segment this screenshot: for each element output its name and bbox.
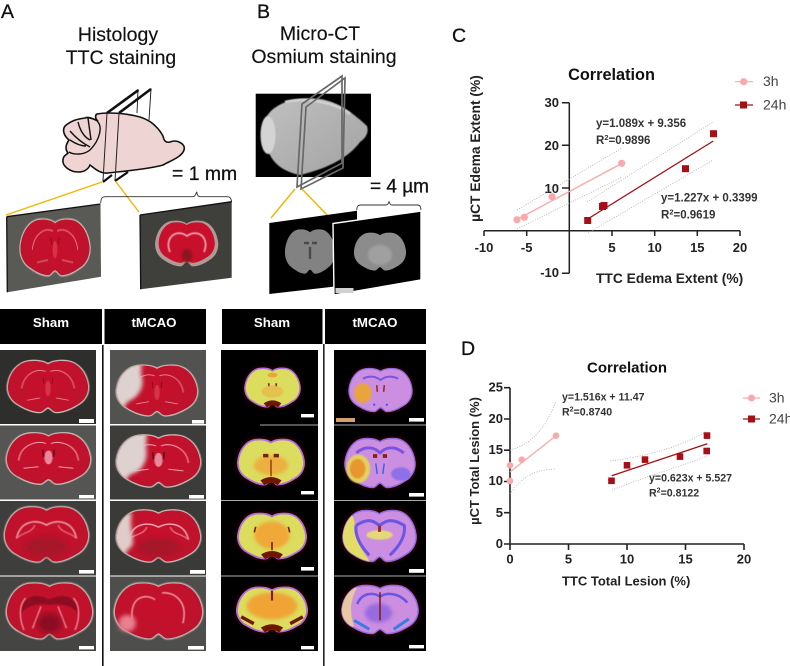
- bracket: spacing between slices: [357, 202, 421, 210]
- tick labels: 0: [506, 552, 514, 566]
- equation: 24h fit: 2: [669, 208, 673, 216]
- header: sham: Sham: [254, 315, 290, 330]
- photo: TTC section two: [140, 202, 232, 289]
- axis title: x: TTC Total Lesion (%): [562, 574, 690, 589]
- tick labels: 20: [733, 240, 747, 255]
- heading: micro-CT osmium staining: Osmium staining: [251, 46, 397, 68]
- legend: 24h: [763, 96, 786, 112]
- axis title: y: µCT Edema Extent (%): [468, 75, 483, 222]
- tick labels: [475, 95, 747, 280]
- tick labels: 20: [489, 411, 503, 426]
- equation: 3h fit: R: [562, 407, 570, 419]
- tick labels: 20: [545, 138, 559, 153]
- confidence bands: [517, 122, 713, 233]
- panel: C edema correlation chart: [452, 25, 786, 286]
- axis title: y: µCT Total Lesion (%): [467, 397, 482, 525]
- CT sham sections: [221, 350, 318, 651]
- tick labels: 0: [496, 536, 503, 551]
- bracket: spacing between sections: [101, 192, 232, 203]
- chart title: Correlation: [587, 360, 667, 377]
- table: TTC section grid: [0, 309, 206, 666]
- TTC sham sections: [0, 350, 96, 651]
- CT tMCAO sections: [334, 350, 426, 651]
- tick labels: 10: [647, 240, 662, 255]
- header: tMCAO: tMCAO: [131, 315, 177, 330]
- tick labels: 10: [489, 473, 503, 488]
- equation: 24h fit: y=1.227x + 0.3399: [661, 193, 758, 205]
- equation: 24h fit: [649, 473, 732, 500]
- image: CT slice one: [269, 211, 357, 294]
- header: sham: Sham: [33, 315, 69, 330]
- heading: histology TTC staining: TTC staining: [66, 47, 176, 69]
- tick labels: 10: [545, 181, 559, 196]
- series: 24h: [584, 130, 717, 224]
- series: 24h: [608, 432, 710, 484]
- equation: 3h fit: y=1.089x + 9.356: [596, 118, 686, 130]
- tick labels: 15: [690, 240, 705, 255]
- panel: B micro-CT schematic: [251, 1, 429, 295]
- arrow: yellow guide lines: [271, 189, 330, 218]
- axes and ticks: [504, 388, 744, 550]
- confidence bands: [510, 401, 707, 494]
- TTC tMCAO sections: [109, 350, 206, 651]
- equation: 3h fit: [562, 392, 645, 419]
- tick labels: 15: [678, 552, 693, 566]
- legend: [735, 73, 786, 112]
- icon: rat brain with slicing planes: [63, 89, 184, 182]
- tick labels: 20: [737, 552, 751, 566]
- legend: 3h: [769, 390, 785, 406]
- heading: histology TTC staining: [66, 24, 176, 69]
- tick labels: [489, 380, 751, 566]
- callout: 1 mm spacing: = 1 mm: [172, 163, 237, 185]
- panel: A histology schematic: [1, 1, 237, 292]
- equation: 3h fit: 2: [570, 407, 574, 414]
- header: tMCAO: tMCAO: [352, 315, 398, 330]
- tick labels: 5: [565, 552, 572, 566]
- tick labels: 15: [489, 442, 503, 457]
- arrow: yellow guide lines: [6, 182, 139, 215]
- heading: micro-CT osmium staining: Micro-CT: [280, 23, 360, 45]
- legend: 3h: [763, 73, 779, 89]
- image: CT slice two: [333, 211, 421, 295]
- equation: 24h fit: R: [661, 210, 669, 222]
- tick labels: -5: [521, 240, 532, 255]
- equation: 3h fit: [596, 118, 686, 147]
- heading: histology TTC staining: Histology: [78, 24, 158, 46]
- header: tMCAO: [325, 309, 426, 344]
- series: 3h: [507, 432, 559, 484]
- equation: 24h fit: =0.9619: [673, 210, 715, 222]
- equation: 24h fit: y=0.623x + 5.527: [649, 473, 732, 485]
- photo: TTC section one: [7, 204, 101, 292]
- heading: micro-CT osmium staining: [251, 23, 397, 68]
- label: panel D: D: [461, 338, 475, 360]
- chart title: Correlation: [568, 66, 655, 84]
- legend: [743, 390, 790, 426]
- divider: [323, 344, 325, 666]
- header: sham: [0, 309, 102, 344]
- callout: 4 micrometre spacing: = 4 µm: [370, 176, 429, 198]
- label: panel A: A: [1, 1, 14, 23]
- photo: whole brain CT render: [256, 94, 371, 177]
- equation: 24h fit: [661, 193, 758, 222]
- label: panel B: B: [257, 1, 270, 23]
- tick labels: 5: [608, 240, 616, 255]
- label: panel C: C: [452, 25, 466, 47]
- header: tMCAO: [104, 309, 206, 344]
- equation: 24h fit: R: [649, 488, 657, 500]
- equation: 3h fit: =0.9896: [608, 135, 650, 147]
- legend: colour scale: [336, 418, 355, 422]
- header: sham: [222, 309, 322, 344]
- tick labels: -10: [475, 240, 493, 255]
- equation: 3h fit: 2: [604, 133, 608, 142]
- equation: 24h fit: =0.8122: [661, 488, 699, 500]
- tick labels: -10: [540, 265, 559, 280]
- equation: 3h fit: y=1.516x + 11.47: [562, 392, 645, 404]
- tick labels: 30: [545, 95, 559, 110]
- tick labels: 5: [496, 505, 503, 520]
- equation: 3h fit: =0.8740: [574, 407, 612, 419]
- equation: 24h fit: 2: [657, 488, 661, 495]
- icon: grey slicing planes: [297, 76, 345, 189]
- series: 3h: [513, 160, 625, 223]
- axis title: x: TTC Edema Extent (%): [596, 271, 743, 286]
- axes and ticks: [484, 103, 740, 273]
- tick labels: 10: [620, 552, 634, 566]
- equation: 3h fit: R: [596, 135, 604, 147]
- tick labels: 25: [489, 380, 503, 395]
- divider: [102, 345, 104, 666]
- panel: D total lesion correlation chart: [461, 338, 790, 589]
- table: micro-CT section grid: [221, 309, 426, 666]
